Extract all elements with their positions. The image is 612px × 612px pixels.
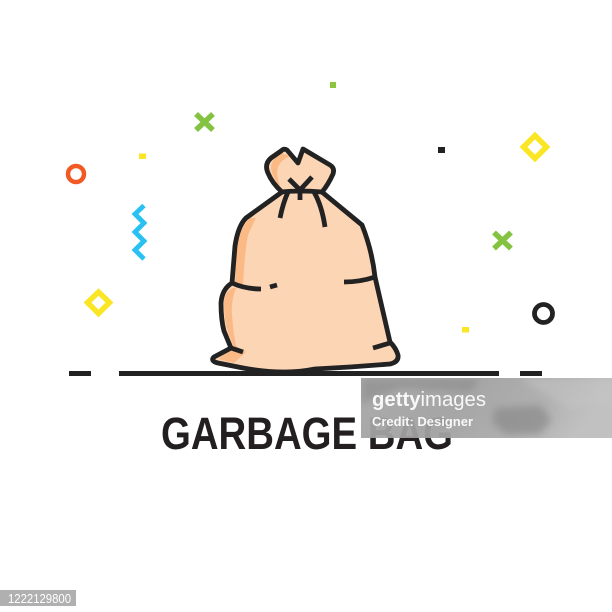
title: GARBAGE BAG: [161, 408, 453, 459]
ground line: left dash: [69, 371, 91, 376]
icon: yellow diamond right: [524, 136, 546, 158]
bag outline: [213, 149, 398, 372]
watermark logo: gettyimages: [372, 389, 486, 411]
bag tie and creases: [231, 177, 390, 352]
icon: yellow dash right: [462, 327, 469, 332]
icon: green cross right: [494, 232, 511, 248]
image id tag: 1222129800: [8, 591, 71, 606]
watermark credit: Credit: Designer: [372, 415, 473, 429]
icon: garbage bag: [213, 149, 398, 372]
icon: black square: [438, 147, 445, 153]
watermark panel: [361, 378, 612, 438]
icon: green cross left: [196, 114, 213, 130]
icon: black ring: [534, 304, 552, 322]
icon: yellow dash left: [139, 154, 146, 159]
ground line: main: [119, 371, 499, 376]
ground line: right dash: [520, 371, 542, 376]
watermark facets: [361, 378, 612, 434]
icon: blue zigzag: [135, 206, 144, 259]
watermark background: [361, 378, 612, 438]
icon: green square top: [330, 82, 336, 88]
bag fill: [213, 149, 398, 372]
icon: yellow diamond left: [88, 292, 110, 314]
icon: orange ring: [68, 166, 84, 182]
bag shaded left side: [218, 153, 290, 363]
